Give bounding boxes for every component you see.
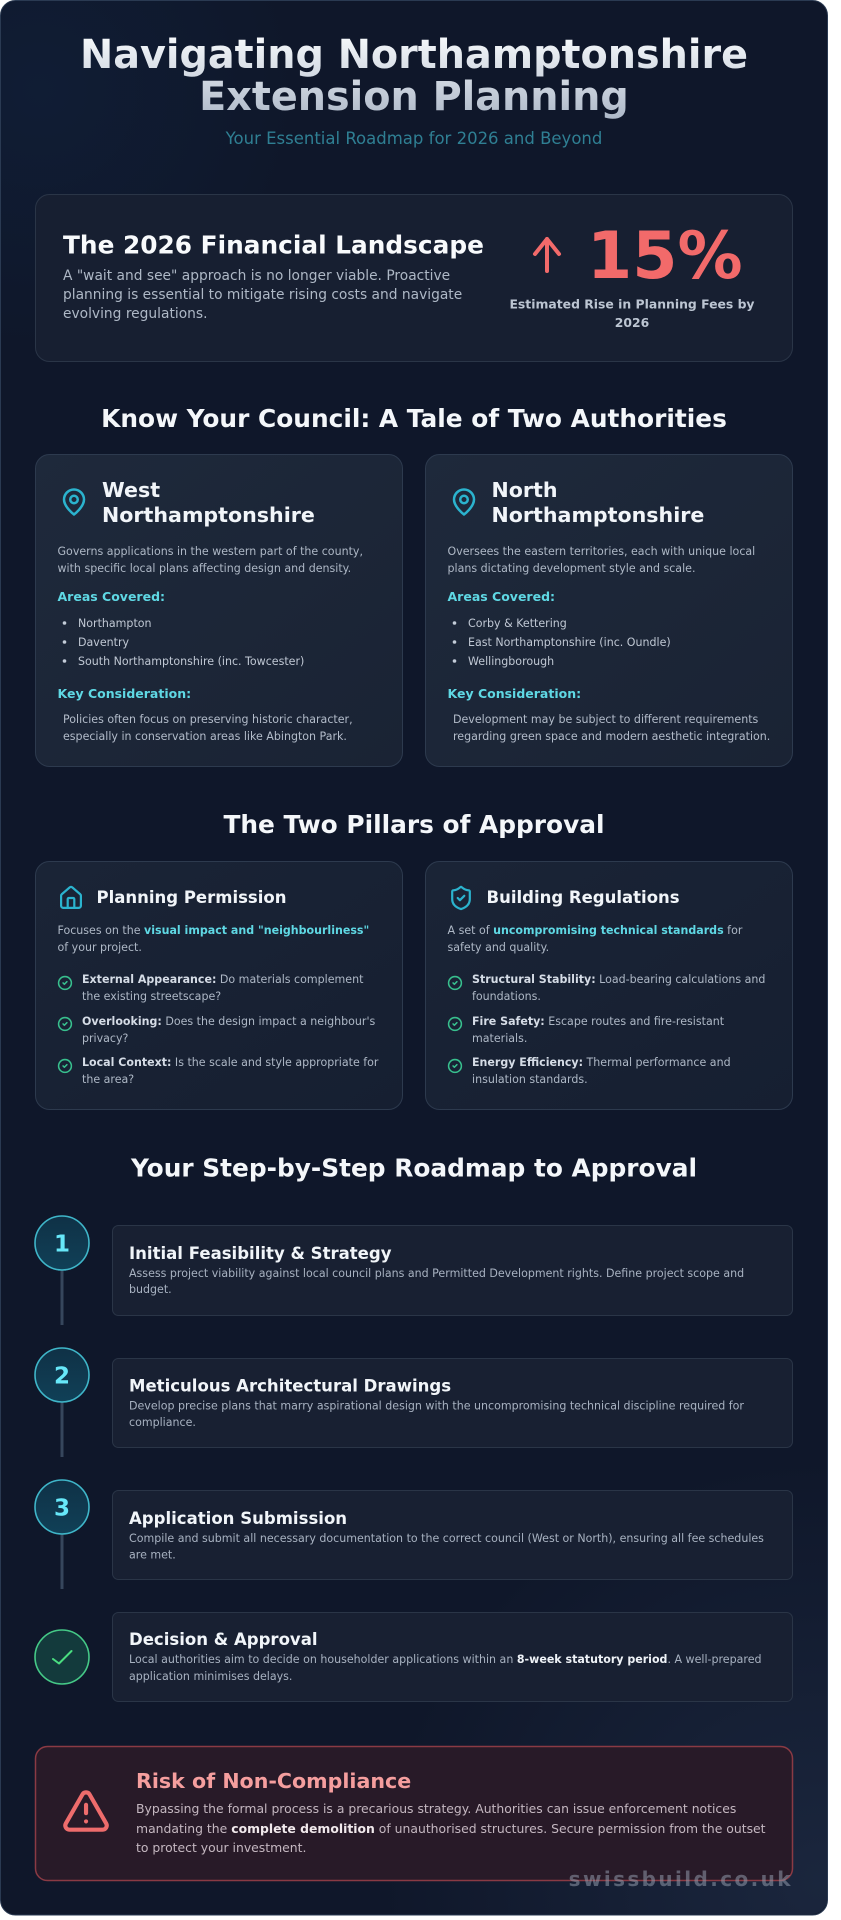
check item: structural stability: foundations. <box>472 990 541 1003</box>
check item: energy efficiency: insulation standards. <box>472 1073 588 1086</box>
check item: fire safety: Fire Safety: Escape routes and fire-resistant <box>472 1015 725 1028</box>
check item: external appearance: External Appearance: Do materials complement <box>82 973 364 986</box>
step 4 <box>35 1612 792 1702</box>
west key consideration text: Policies often focus on preserving historic character, <box>63 713 353 726</box>
step 3 connector <box>60 1534 64 1589</box>
north description: Oversees the eastern territories, each with unique local <box>448 545 755 558</box>
title: Navigating Northamptonshire <box>80 32 748 78</box>
check item: overlooking: Overlooking: Does the design impact a neighbour's <box>82 1015 376 1028</box>
financial body text: planning is essential to mitigate rising costs and navigate <box>63 287 462 303</box>
risk heading: Risk of Non-Compliance <box>136 1769 411 1793</box>
step 1 card <box>112 1226 792 1316</box>
step 3 card <box>112 1490 792 1580</box>
step 3 card: are met. <box>129 1548 176 1562</box>
west key consideration text: especially in conservation areas like Abington Park. <box>63 730 347 743</box>
icon: warning triangle <box>65 1792 107 1830</box>
north areas list: Corby & Kettering <box>468 617 567 630</box>
step 1 badge: 1 <box>54 1232 70 1258</box>
heading: roadmap: Your Step-by-Step Roadmap to Approval <box>130 1154 697 1182</box>
check item: local context: the area? <box>82 1073 134 1086</box>
panel: west northamptonshire <box>36 454 402 766</box>
step 1 connector <box>60 1270 64 1325</box>
north key consideration label: Key Consideration: <box>448 686 581 701</box>
west title <box>102 478 315 527</box>
icon: shield check <box>452 887 470 909</box>
west description: with specific local plans affecting design and density. <box>58 562 351 575</box>
statistic caption: Estimated Rise in Planning Fees by <box>509 296 755 312</box>
north description: plans dictating development style and scale. <box>448 562 695 575</box>
step 2 card: Meticulous Architectural Drawings <box>129 1376 451 1396</box>
check item: structural stability <box>449 973 765 1003</box>
building regulations title: Building Regulations <box>486 888 680 907</box>
west areas list: Northampton <box>78 617 152 630</box>
heading: two pillars: The Two Pillars of Approval <box>223 810 605 839</box>
step 1 card: Assess project viability against local council plans and Permitted Development rights. Define project scope and <box>129 1267 744 1280</box>
statistic caption: 2026 <box>615 315 649 330</box>
west key consideration label: Key Consideration: <box>58 686 191 701</box>
north title: North <box>492 478 558 502</box>
financial body text: evolving regulations. <box>63 306 207 322</box>
check item: overlooking <box>59 1015 376 1045</box>
north description <box>448 545 755 575</box>
north key consideration text: regarding green space and modern aesthetic integration. <box>453 730 770 743</box>
statistic 15%: 15% <box>587 219 743 294</box>
step 3 card: Application Submission <box>129 1509 347 1528</box>
step 3 <box>35 1480 792 1589</box>
icon: house <box>61 887 81 908</box>
check item: fire safety <box>449 1015 725 1045</box>
north areas list <box>453 617 671 668</box>
title <box>80 32 748 120</box>
building regulations description <box>448 924 743 954</box>
financial body text: A "wait and see" approach is no longer viable. Proactive <box>63 268 450 284</box>
risk body text <box>136 1801 766 1855</box>
step 2 badge <box>35 1348 89 1402</box>
check item: fire safety: materials. <box>472 1032 527 1045</box>
statistic caption <box>509 296 755 330</box>
north areas label: Areas Covered: <box>448 589 555 604</box>
north key consideration text <box>453 713 770 743</box>
west description <box>58 545 363 575</box>
panel: risk of non-compliance <box>36 1746 792 1880</box>
north areas list: Wellingborough <box>468 655 554 668</box>
step 4 card: application minimises delays. <box>129 1670 292 1683</box>
north areas list: East Northamptonshire (inc. Oundle) <box>468 636 671 649</box>
step 3 card: Compile and submit all necessary documentation to the correct council (West or North), ensuring all fee schedules <box>129 1532 764 1545</box>
check item: energy efficiency <box>449 1056 731 1086</box>
west title: West <box>102 478 160 502</box>
step 2 card: compliance. <box>129 1416 196 1429</box>
financial body text <box>63 268 462 322</box>
planning title: Planning Permission <box>96 888 286 907</box>
step 1 badge <box>35 1216 89 1270</box>
step 3 badge <box>35 1480 89 1534</box>
panel: planning permission <box>36 862 402 1110</box>
planning description: Focuses on the visual impact and "neighbourliness" <box>58 924 369 937</box>
financial heading: The 2026 Financial Landscape <box>63 230 484 260</box>
step 2 card: Develop precise plans that marry aspirational design with the uncompromising technical discipline required for <box>129 1400 744 1412</box>
step 2 <box>35 1348 792 1457</box>
check item: structural stability: Structural Stability: Load-bearing calculations and <box>472 973 765 986</box>
panel: financial landscape <box>36 194 792 362</box>
west title: Northamptonshire <box>102 503 315 527</box>
west areas label: Areas Covered: <box>58 589 165 604</box>
step 4 card: Local authorities aim to decide on householder applications within an 8-week statutory period. A well-prepared <box>129 1653 762 1666</box>
west areas list: Daventry <box>78 636 129 649</box>
building regulations description: A set of uncompromising technical standards for <box>448 924 743 937</box>
risk body text: to protect your investment. <box>136 1840 306 1855</box>
west areas list <box>63 617 304 668</box>
north title <box>492 478 704 527</box>
step 1 card: budget. <box>129 1283 172 1296</box>
panel: north northamptonshire <box>426 454 792 766</box>
step 2 card <box>112 1358 792 1448</box>
west key consideration text <box>63 713 353 743</box>
panel: building regulations <box>426 862 792 1110</box>
icon: map pin <box>454 490 474 514</box>
west description: Governs applications in the western part of the county, <box>58 545 363 558</box>
check item: external appearance: the existing streetscape? <box>82 990 221 1003</box>
north key consideration text: Development may be subject to different requirements <box>453 713 759 726</box>
step 2 connector <box>60 1402 64 1457</box>
check item: overlooking: privacy? <box>82 1032 129 1045</box>
risk body text: mandating the complete demolition of unauthorised structures. Secure permission from the outset <box>136 1821 766 1836</box>
step 2 badge: 2 <box>54 1364 70 1390</box>
subtitle: Your Essential Roadmap for 2026 and Beyond <box>225 129 602 148</box>
north title: Northamptonshire <box>492 503 704 527</box>
step 1 <box>35 1216 792 1325</box>
west areas list: South Northamptonshire (inc. Towcester) <box>78 655 304 668</box>
icon: map pin <box>64 490 84 514</box>
step 3 badge: 3 <box>54 1496 70 1522</box>
check item: energy efficiency: Energy Efficiency: Thermal performance and <box>472 1056 731 1069</box>
heading: know your council: Know Your Council: A Tale of Two Authorities <box>101 404 727 433</box>
icon: up arrow <box>535 239 559 271</box>
planning description <box>58 924 369 954</box>
check item: local context <box>59 1056 379 1086</box>
check item: external appearance <box>59 973 364 1003</box>
step 4 badge <box>35 1630 89 1684</box>
step 4 card: Decision & Approval <box>129 1630 318 1649</box>
step 1 card: Initial Feasibility & Strategy <box>129 1244 392 1263</box>
check item: local context: Local Context: Is the scale and style appropriate for <box>82 1056 379 1069</box>
building regulations description: safety and quality. <box>448 941 549 954</box>
planning description: of your project. <box>58 941 142 954</box>
title: Extension Planning <box>199 74 629 120</box>
watermark: swissbuild.co.uk <box>569 1867 793 1891</box>
risk body text: Bypassing the formal process is a precarious strategy. Authorities can issue enforcement notices <box>136 1801 736 1816</box>
step 4 card <box>112 1612 792 1702</box>
